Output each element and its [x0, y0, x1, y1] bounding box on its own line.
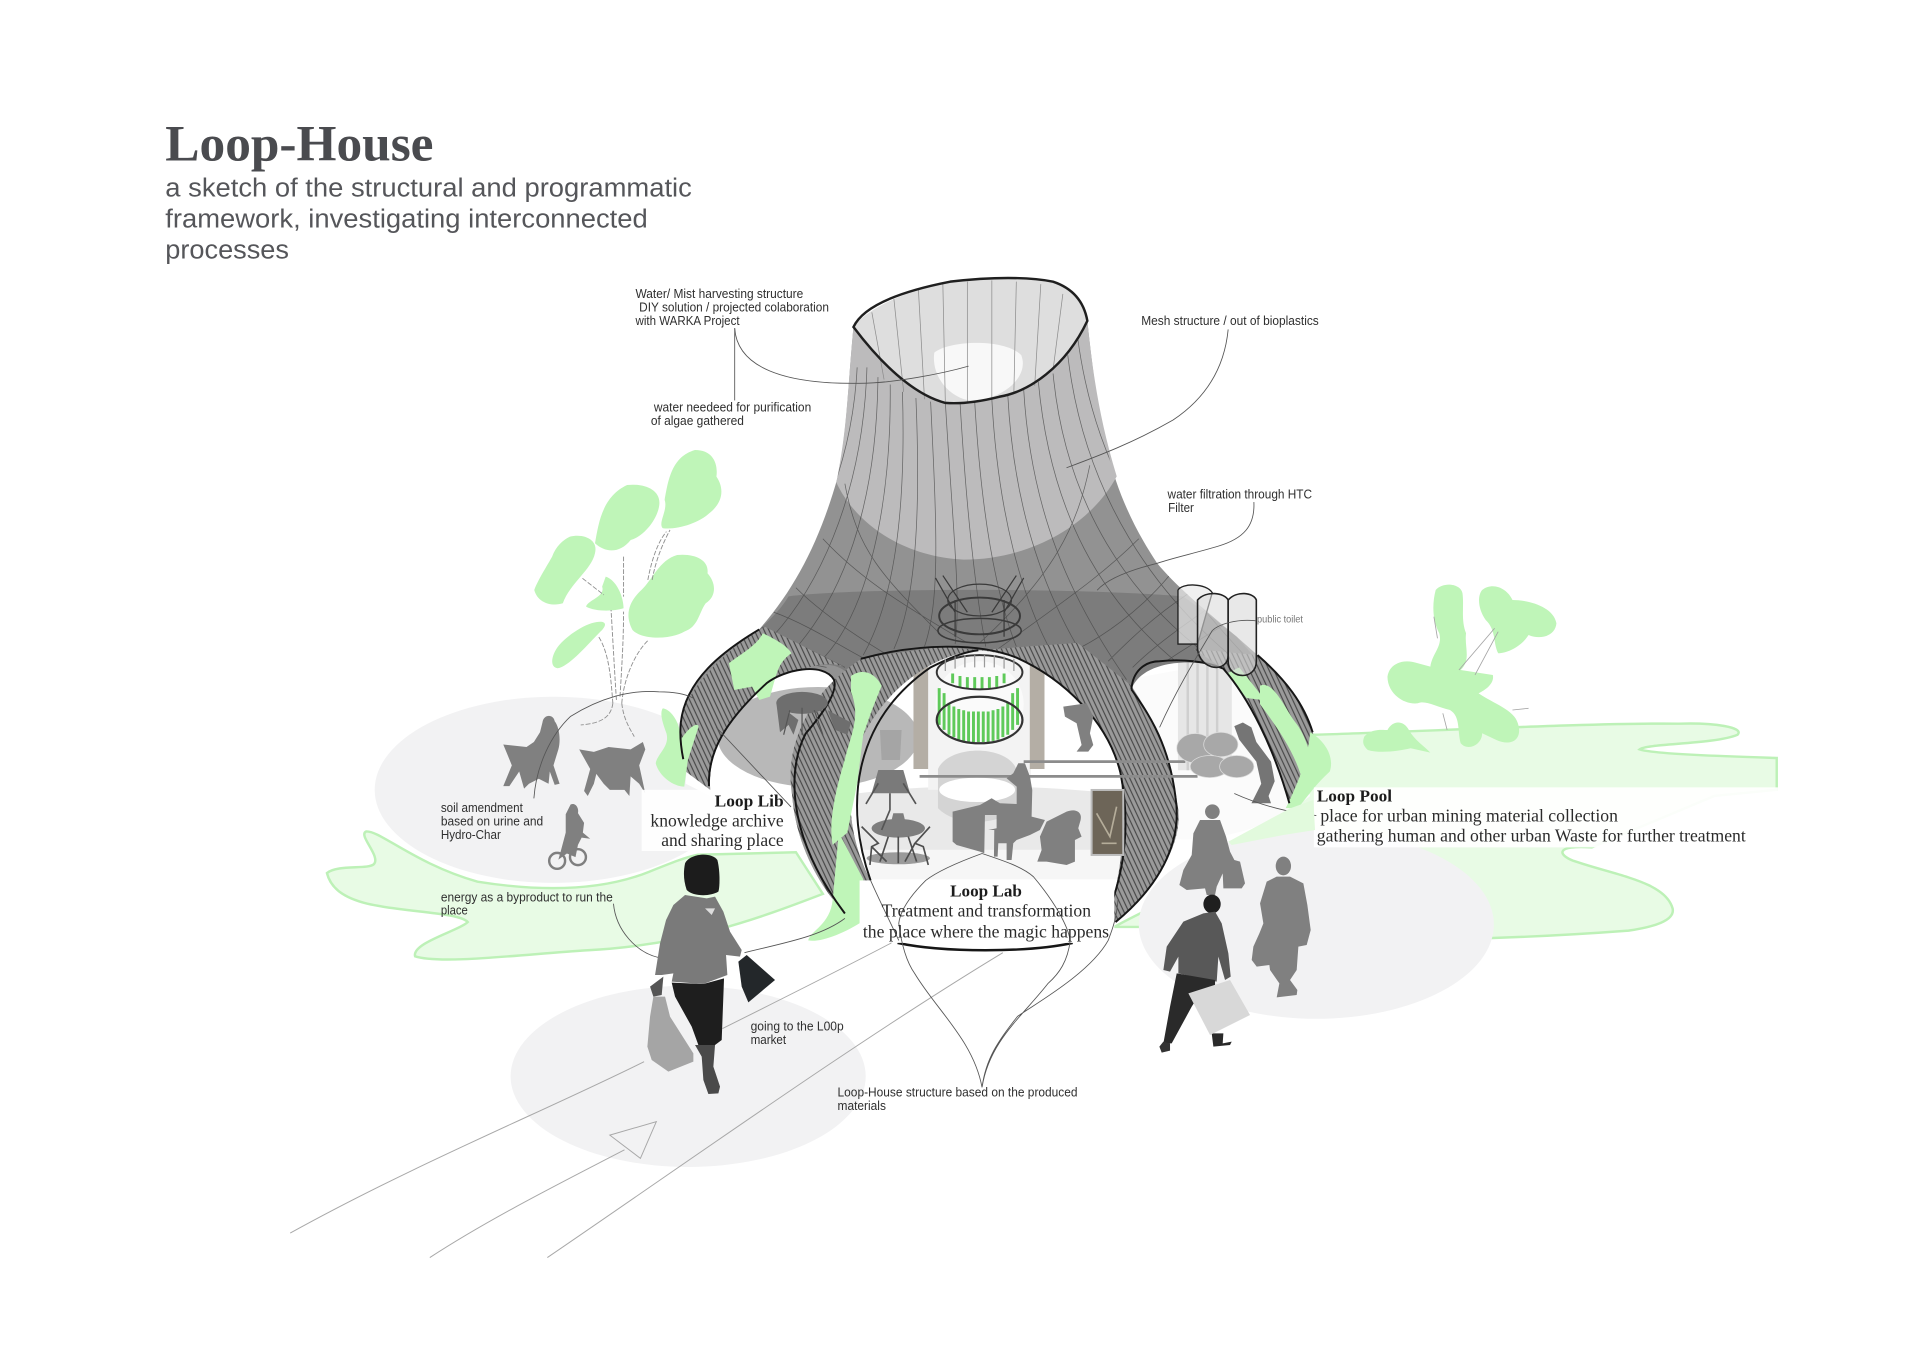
- drum interior: [936, 661, 1024, 747]
- grey walker front: [1252, 857, 1311, 997]
- note: mesh structure: Mesh structure / out of bioplastics: [1141, 313, 1319, 328]
- note: loop market: [751, 1019, 844, 1047]
- table and chairs: [862, 813, 930, 865]
- column 2: [1198, 594, 1228, 667]
- subtitle: [165, 175, 692, 264]
- tree foliage: [534, 450, 721, 668]
- note: water mist: with WARKA Project: [635, 313, 740, 328]
- white drum top: [939, 778, 1015, 802]
- tree foliage: [1363, 585, 1556, 753]
- green puddle: left ground: [327, 831, 823, 960]
- upper bars: [945, 655, 1014, 671]
- skirt: [672, 978, 724, 1045]
- leader: public toilet: [1160, 620, 1256, 727]
- leader: loop-house structure teardrop: [871, 853, 1118, 1087]
- hatched leg: far right: [1194, 649, 1314, 803]
- grey ground circle: left: [375, 697, 732, 883]
- note: energy: [441, 890, 613, 918]
- note: public toilet: public toilet: [1257, 615, 1303, 626]
- drum rings: [937, 655, 1022, 689]
- body dark lower band: [716, 590, 1280, 689]
- note: water mist: Water/ Mist harvesting structure: [636, 286, 803, 301]
- label: loop pool: place for urban mining material collection: [1320, 807, 1618, 826]
- green growth on other legs: [808, 667, 1331, 941]
- column 3: [1228, 594, 1256, 675]
- right room silhouettes: [1177, 722, 1275, 803]
- note: soil amendment: [441, 800, 543, 842]
- note: loop market: going to the L00p: [751, 1019, 844, 1034]
- subtitle: a sketch of the structural and programmatic: [165, 175, 692, 203]
- cyclist: [549, 804, 590, 869]
- desk and seated person: [953, 763, 1045, 860]
- right tree: [1363, 585, 1556, 753]
- right room translucent columns: [1178, 637, 1232, 770]
- loop lib label backdrop: [642, 790, 789, 851]
- central room floor: [857, 786, 1133, 850]
- leader: water mist: [735, 328, 969, 383]
- note: energy: energy as a byproduct to run the: [441, 890, 613, 905]
- mesh lines: [736, 340, 1243, 680]
- leader: water for purification: [734, 328, 736, 400]
- lunar lander model: [866, 730, 916, 830]
- note: structure materials: materials: [838, 1098, 886, 1113]
- horizontal service bars: [920, 762, 1198, 776]
- note: water for purification: water needeed for purification: [653, 400, 811, 415]
- leader: loop pool: [1234, 793, 1316, 816]
- filter discs: [1177, 732, 1254, 778]
- interior: left room: [686, 661, 845, 808]
- label: loop lab: Treatment and transformation: [882, 902, 1091, 921]
- tree trunk: [581, 530, 670, 737]
- note: water for purification: of algae gathered: [651, 413, 744, 428]
- note: htc filter: water filtration through HTC: [1167, 486, 1312, 501]
- central room silhouettes: [862, 703, 1123, 865]
- left room furniture: [776, 692, 851, 735]
- leader: mesh structure: [1067, 329, 1228, 468]
- tree branches: [1434, 617, 1529, 730]
- direction arrow: [610, 1122, 656, 1158]
- green algae drum: [936, 655, 1024, 747]
- skeleton cabinet: [1092, 790, 1123, 855]
- rim ribs: [872, 280, 1063, 402]
- note: water mist: DIY solution / projected colaboration: [639, 300, 829, 315]
- person with hat: [1234, 722, 1275, 803]
- green puddle: right ground: [1114, 724, 1777, 943]
- body base silhouette: [680, 321, 1315, 922]
- mist harvesting white core: [934, 343, 1023, 401]
- note: loop market: market: [751, 1032, 787, 1047]
- note: htc filter: Filter: [1168, 500, 1195, 515]
- body light upper section: [836, 321, 1117, 560]
- label: loop lib: and sharing place: [661, 831, 784, 850]
- note: energy: place: [441, 903, 468, 918]
- people on the right: [1159, 800, 1315, 1053]
- note: htc filter: [1167, 486, 1312, 515]
- outdoor seating silhouettes: [503, 716, 645, 869]
- central pale column: [928, 649, 1031, 790]
- label: loop lab: Loop Lab: [950, 882, 1022, 901]
- collar: [705, 908, 715, 915]
- grey ground circle: right: [1139, 830, 1494, 1019]
- title: Loop-House: [165, 115, 433, 172]
- man with white sack: [1159, 895, 1250, 1053]
- dome interiors: [686, 606, 1310, 946]
- note: water mist: [635, 286, 829, 328]
- loop pool label backdrop: [1314, 787, 1778, 847]
- road edge left: [290, 943, 891, 1233]
- left tree: [534, 450, 721, 737]
- green growth on left legs: [656, 633, 791, 787]
- basket branches: [936, 576, 1024, 637]
- grey ground circle: market: [511, 986, 866, 1167]
- hatched leg: centre left: [791, 647, 978, 913]
- hair: [684, 855, 720, 895]
- leader: floor line: [716, 727, 791, 807]
- plastic bag: [647, 997, 693, 1072]
- central floor lower: [862, 850, 1124, 879]
- legs: [695, 1045, 720, 1094]
- table top: [776, 692, 828, 714]
- top rim opening: [853, 278, 1087, 403]
- hatched leg: far left: [680, 627, 845, 790]
- left room floor disc: [718, 687, 918, 787]
- label: loop lib: Loop Lib: [715, 792, 784, 811]
- label: loop lib: [650, 792, 784, 850]
- person at table: [503, 716, 560, 789]
- basket rings: [948, 584, 1011, 616]
- note: water for purification: [651, 400, 811, 428]
- title block: [165, 115, 692, 264]
- rim outline: [853, 278, 1087, 403]
- road centre: [430, 1150, 624, 1258]
- label: loop lab: the place where the magic happens: [863, 922, 1109, 941]
- note: structure materials: Loop-House structure based on the produced: [838, 1085, 1078, 1100]
- hand: [650, 977, 663, 997]
- green runoff: [1228, 800, 1315, 845]
- dark handbag: [738, 955, 775, 1002]
- column 1: [1178, 585, 1212, 644]
- table legs: [784, 708, 823, 735]
- arch outlines: [680, 629, 1313, 922]
- road edge right: [547, 953, 1003, 1258]
- subtitle: processes: [165, 236, 289, 264]
- label: loop lib: knowledge archive: [650, 812, 784, 831]
- note: soil amendment: based on urine and: [441, 813, 543, 828]
- shirt: [655, 895, 742, 984]
- light drum: [938, 751, 1016, 822]
- interior: central room: [806, 644, 1172, 946]
- road lines: [290, 943, 1003, 1258]
- chairs: [776, 703, 851, 735]
- label: loop pool: [1317, 787, 1746, 846]
- label: loop pool: gathering human and other urban Waste for further treatment: [1317, 827, 1746, 846]
- label: loop pool: Loop Pool: [1317, 787, 1392, 806]
- kneeling person: [1037, 810, 1082, 865]
- label: loop lab: [863, 882, 1109, 941]
- interior: right room: [1127, 655, 1310, 839]
- woman with shopping bags: [647, 855, 775, 1094]
- leader: soil amendment: [534, 691, 693, 798]
- dome base arc: [898, 943, 1073, 950]
- leader: htc filter: [1097, 502, 1254, 590]
- leader: energy: [613, 904, 845, 958]
- pale pillars: [913, 606, 1044, 769]
- standing figure: [1063, 703, 1093, 752]
- loop lab label backdrop: [860, 880, 1114, 943]
- subtitle: framework, investigating interconnected: [165, 205, 648, 233]
- table and chairs: [579, 742, 645, 796]
- note: structure materials: [838, 1085, 1078, 1113]
- note: soil amendment: soil amendment: [441, 800, 523, 815]
- note: soil amendment: Hydro-Char: [441, 827, 502, 842]
- mesh structure body: [656, 278, 1331, 950]
- grey walker with bags: [1179, 804, 1245, 895]
- filter cylinders: [1178, 585, 1256, 675]
- green bars: [939, 673, 1018, 742]
- wire basket: [936, 576, 1024, 643]
- hatched leg: centre right: [978, 643, 1179, 922]
